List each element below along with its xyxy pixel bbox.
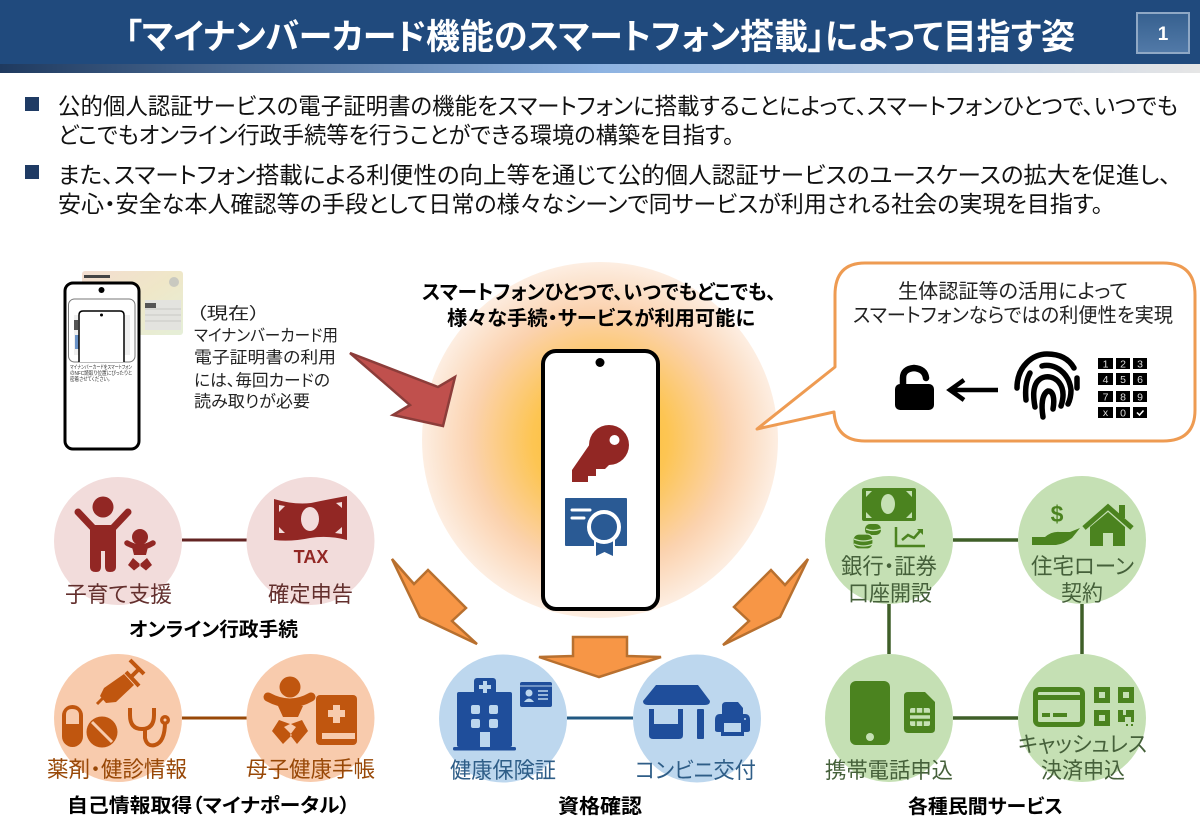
icon: hospital (453, 678, 552, 750)
current state text: 読み取りが必要 (194, 392, 310, 411)
intro text: 安心・安全な本人確認等の手段として日常の様々なシーンで同サービスが利用される社会の実現を目指す。 (58, 191, 1103, 217)
label: tax return: 確定申告 (268, 582, 353, 607)
icon: ID card (520, 682, 552, 707)
arrow: to eligibility (539, 637, 661, 677)
current card and phone: 密着させてください。 (70, 375, 110, 383)
icon: mobile phone and SIM (850, 681, 935, 745)
intro text (25, 93, 1178, 217)
icon: payment card and QR code (1035, 687, 1134, 726)
label: maternal and child health handbook: 母子健康手帳 (246, 757, 375, 782)
intro text: 公的個人認証サービスの電子証明書の機能をスマートフォンに搭載することによって、スマートフォンひとつで、いつでも (58, 93, 1178, 119)
icon: keypad: 7 (1103, 392, 1109, 404)
icon: certificate (565, 498, 627, 556)
label: housing loan contract: 住宅ローン (1031, 554, 1134, 579)
panel: eligibility check (439, 654, 761, 818)
icon: keypad: 2 (1120, 358, 1126, 370)
arrow: to online procedures (392, 559, 477, 644)
page number: 1 (1158, 24, 1169, 45)
icon: keypad (1098, 358, 1147, 420)
intro text: どこでもオンライン行政手続等を行うことができる環境の構築を目指す。 (58, 122, 734, 148)
label: medication and checkup information: 薬剤・健診情報 (47, 757, 187, 782)
icon: unlocked padlock (895, 368, 934, 410)
icon: keypad: 3 (1137, 358, 1143, 370)
label: childcare support: 子育て支援 (65, 582, 172, 607)
central glow (422, 262, 778, 618)
current state text (194, 304, 338, 411)
intro text: また、スマートフォン搭載による利便性の向上等を通じて公的個人認証サービスのユースケースの拡大を促進し、 (58, 162, 1171, 188)
label: cashless payment application: キャッシュレス (1018, 732, 1147, 757)
icon: keypad: 9 (1137, 392, 1143, 404)
current state text: には、毎回カードの (194, 371, 330, 390)
header (0, 0, 1200, 73)
central headline: 様々な手続・サービスが利用可能に (447, 306, 755, 330)
icon: home loan (1032, 501, 1132, 546)
icon: tax banknote (274, 496, 347, 567)
current card and phone: のNFC読取り位置にぴったりと (70, 369, 132, 377)
callout: biometrics (757, 263, 1195, 441)
current state text: マイナンバーカード用 (194, 327, 338, 345)
icon: keypad: 6 (1137, 374, 1143, 386)
label: bank and securities account: 口座開設 (848, 581, 932, 606)
callout: biometrics: スマートフォンならではの利便性を実現 (853, 304, 1173, 327)
current card and phone (65, 271, 183, 449)
icon: keypad: 4 (1103, 374, 1109, 386)
icon: left arrow (950, 380, 998, 400)
heading: 各種民間サービス (908, 795, 1063, 818)
icon: keypad: x (1103, 407, 1109, 419)
icon: convenience store and printer (643, 685, 750, 739)
heading: 自己情報取得（マイナポータル） (67, 795, 350, 817)
icon: banknote, coins and chart (853, 488, 925, 549)
current card and phone: マイナンバーカードをスマートフォン (70, 364, 133, 371)
icon: keypad: 8 (1120, 392, 1126, 404)
icon: parent and baby (78, 496, 153, 572)
central headline (422, 281, 776, 330)
icon: tax banknote: TAX (294, 547, 328, 567)
icon: home loan: $ (1051, 501, 1064, 527)
heading: 資格確認 (558, 795, 642, 818)
arrow: current to smartphone (350, 353, 455, 426)
panel: online administrative procedures (54, 477, 374, 641)
panel: self information via Mynaportal (47, 654, 375, 817)
heading: オンライン行政手続 (129, 619, 298, 641)
label: health insurance card: 健康保険証 (450, 758, 556, 783)
icon: keypad: 1 (1103, 358, 1109, 370)
label: mobile phone application: 携帯電話申込 (825, 758, 953, 783)
icon: key (572, 425, 629, 482)
label: housing loan contract (1031, 554, 1134, 606)
arrow: to private services (723, 559, 808, 645)
label: bank and securities account: 銀行・証券 (841, 554, 937, 579)
icon: fingerprint (1017, 354, 1077, 417)
icon: keypad: 0 (1120, 408, 1126, 420)
current state text: 電子証明書の利用 (194, 348, 336, 367)
label: cashless payment application: 決済申込 (1041, 758, 1125, 783)
icon: baby and health book (268, 676, 357, 745)
icon: syringe, pills and stethoscope (62, 660, 170, 748)
label: housing loan contract: 契約 (1061, 581, 1103, 606)
label: bank and securities account (841, 554, 937, 606)
title: 「マイナンバーカード機能のスマートフォン搭載」によって目指す姿 (125, 18, 1075, 57)
callout: biometrics: 生体認証等の活用によって (898, 280, 1128, 303)
label: convenience store issuance: コンビニ交付 (635, 758, 756, 783)
icon: keypad: 5 (1120, 374, 1126, 386)
label: cashless payment application (1018, 732, 1147, 783)
current state text: （現在） (196, 304, 260, 323)
page number (1137, 13, 1189, 53)
panel: private services (825, 476, 1147, 818)
central smartphone (543, 351, 658, 609)
central headline: スマートフォンひとつで、いつでもどこでも、 (422, 281, 776, 304)
